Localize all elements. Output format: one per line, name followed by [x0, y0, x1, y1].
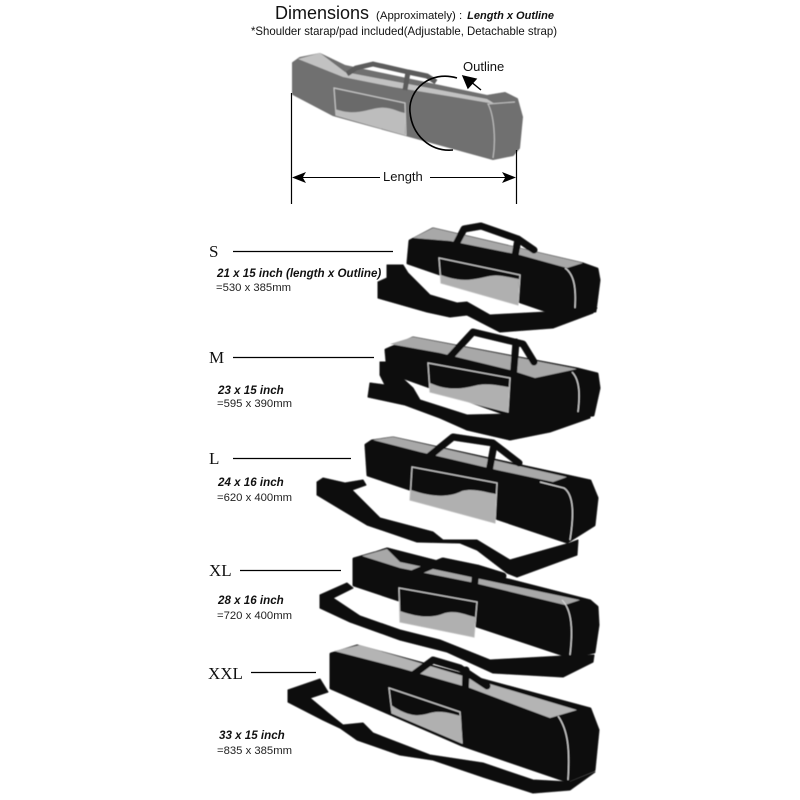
length arrow left [292, 172, 380, 183]
XXL metric: =835 x 385mm [217, 745, 292, 757]
size M [209, 332, 599, 440]
S bag [378, 226, 599, 332]
L label: L [209, 449, 219, 468]
M bag [368, 332, 599, 440]
L metric: =620 x 400mm [217, 492, 292, 504]
length arrow right [430, 172, 516, 183]
M metric: =595 x 390mm [217, 398, 292, 410]
S dimensions: 21 x 15 inch (length x Outline) [216, 267, 381, 280]
L leader line [233, 458, 351, 460]
outline label: Outline [463, 59, 504, 74]
XL dimensions: 28 x 16 inch [217, 594, 284, 607]
M leader line [233, 356, 374, 358]
XXL label: XXL [208, 664, 243, 683]
XL label: XL [209, 561, 232, 580]
XL metric: =720 x 400mm [217, 610, 292, 622]
S leader line [233, 250, 393, 252]
subtitle note: *Shoulder starap/pad included(Adjustable, Detachable strap) [251, 24, 557, 38]
outline circle arrow [410, 76, 457, 150]
size XXL [208, 645, 598, 793]
XL bag [320, 549, 598, 677]
length extension lines [292, 93, 516, 204]
XXL bag [288, 645, 598, 793]
L bag [317, 437, 597, 577]
size S [209, 226, 599, 332]
size L [209, 437, 597, 577]
length label: Length [383, 169, 423, 184]
M dimensions: 23 x 15 inch [217, 384, 284, 397]
S metric: =530 x 385mm [216, 282, 291, 294]
XXL dimensions: 33 x 15 inch [219, 729, 285, 742]
L dimensions: 24 x 16 inch [217, 476, 284, 489]
outline arrow head [463, 76, 481, 90]
XXL leader line [251, 672, 316, 674]
S label: S [209, 242, 218, 261]
size XL [209, 549, 598, 677]
grey bag artwork [293, 53, 522, 159]
XL leader line [240, 570, 341, 572]
title: Dimensions (Approximately) : Length x Outline [275, 3, 554, 23]
M label: M [209, 348, 224, 367]
diagram: grey bag with dimensions [292, 53, 522, 204]
